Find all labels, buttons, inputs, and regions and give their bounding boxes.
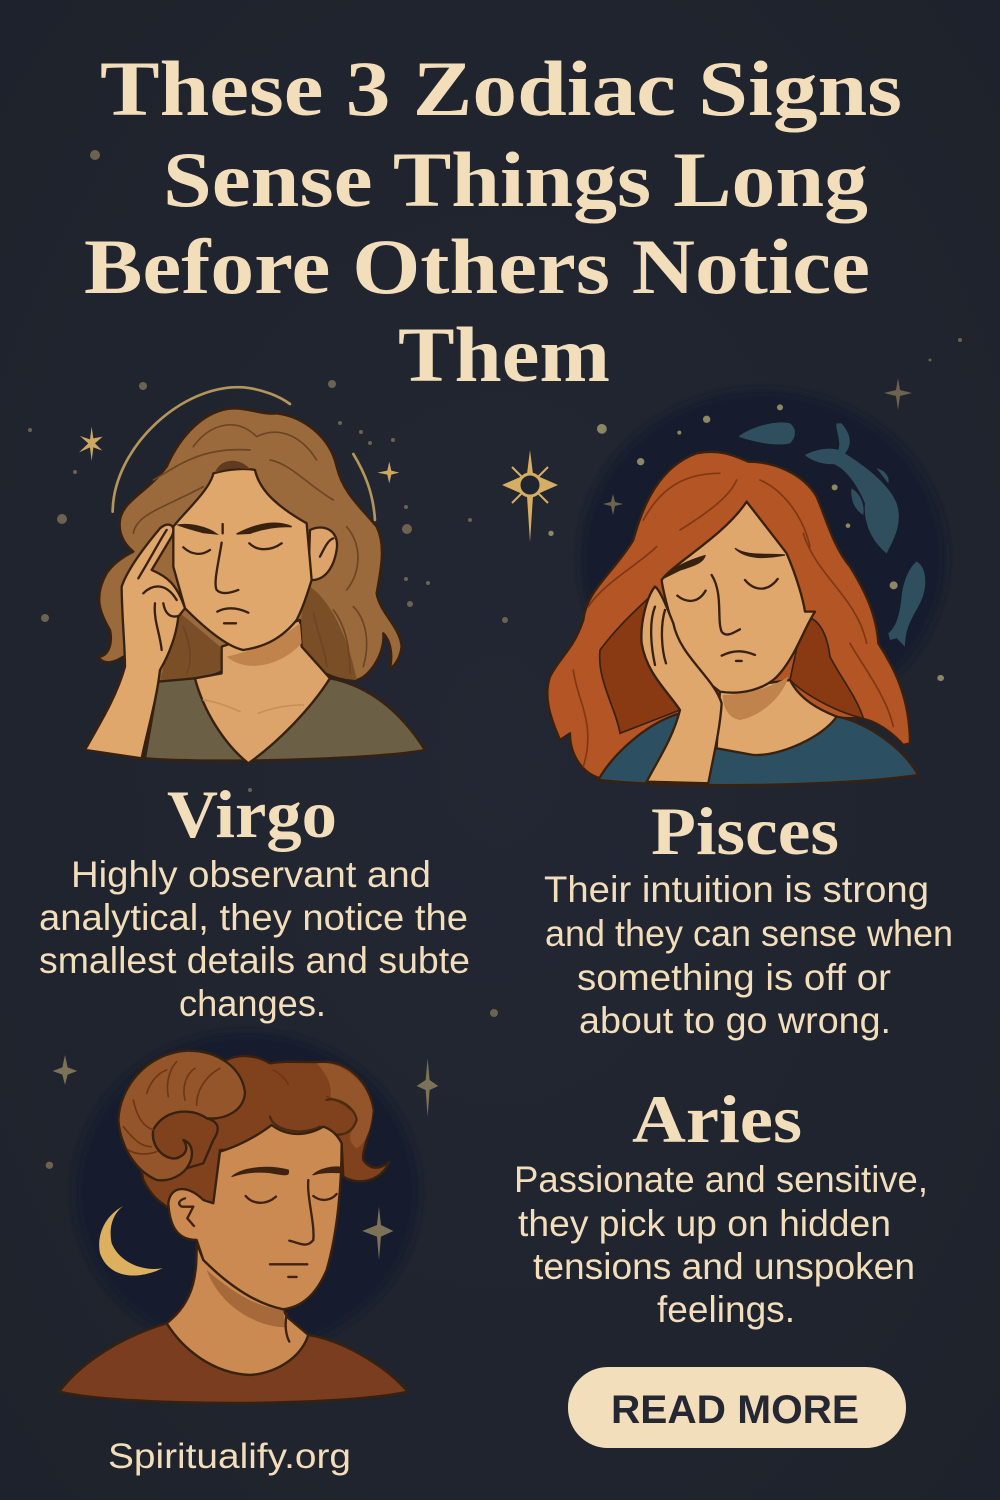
virgo illustration [79, 387, 425, 763]
hair shadow [160, 583, 357, 682]
neck [195, 620, 330, 763]
hair [547, 452, 910, 778]
virgo description: Highly observant and [71, 854, 431, 895]
aries description: feelings. [657, 1289, 795, 1330]
hair strands [573, 473, 893, 767]
title: Them [398, 311, 610, 398]
pisces description: something is off or [577, 957, 891, 998]
crescent moon [99, 1206, 163, 1276]
aries description: tensions and unspoken [533, 1246, 915, 1287]
facial features [663, 548, 785, 578]
shirt [59, 1323, 408, 1403]
neck shadow [723, 677, 788, 720]
virgo description: smallest details and subte [39, 940, 470, 981]
pisces description: about to go wrong. [579, 1000, 891, 1041]
read more button [568, 1367, 906, 1448]
title [84, 45, 902, 398]
forehead hair [215, 461, 250, 473]
face [662, 502, 815, 693]
virgo heading: Virgo [167, 776, 337, 852]
night circle [580, 390, 946, 726]
aries illustration [46, 1032, 438, 1403]
shirt [598, 713, 918, 785]
aries heading: Aries [632, 1081, 802, 1157]
virgo description: analytical, they notice the [39, 897, 468, 938]
pisces illustration [502, 378, 946, 785]
fingers [651, 607, 666, 665]
neck [167, 1243, 308, 1375]
hand [641, 587, 722, 783]
pisces description: Their intuition is strong [544, 869, 929, 910]
left ram horn [118, 1051, 245, 1180]
night circle [75, 1032, 419, 1352]
virgo description: changes. [179, 983, 326, 1024]
source site: Spiritualify.org [108, 1437, 351, 1476]
compass star [502, 450, 558, 542]
back hair [140, 1056, 389, 1207]
sparkle stars [79, 427, 399, 483]
hair [98, 408, 402, 682]
hair strands [133, 425, 367, 673]
ear [308, 527, 337, 580]
shirt [145, 678, 425, 763]
collarbones [203, 700, 303, 713]
pisces description [544, 869, 953, 1041]
arm and hand [85, 525, 185, 758]
title: Sense Things Long [163, 136, 868, 223]
horn ridges [123, 1062, 350, 1154]
face [173, 469, 312, 650]
hair shadow [600, 593, 863, 733]
title: These 3 Zodiac Signs [100, 45, 902, 132]
pisces heading: Pisces [651, 793, 839, 869]
inner curl [153, 1112, 218, 1168]
aries description: they pick up on hidden [518, 1203, 891, 1244]
circle dots [548, 404, 944, 681]
fish [738, 422, 925, 647]
fingers [138, 530, 178, 650]
virgo description [39, 854, 470, 1024]
title: Before Others Notice [84, 223, 870, 310]
face and ear [168, 1125, 342, 1309]
facial features [232, 1167, 342, 1177]
neck shadow [207, 1270, 285, 1327]
pisces description: and they can sense when [545, 913, 953, 954]
neck [717, 680, 837, 755]
read more button: READ MORE [611, 1388, 859, 1432]
faint star [603, 378, 912, 515]
right horn [317, 1063, 373, 1148]
aries description [514, 1159, 928, 1330]
aries description: Passionate and sensitive, [514, 1159, 928, 1200]
stars [53, 1055, 438, 1260]
neck shadow [227, 623, 302, 666]
halo arcs [113, 387, 290, 512]
facial features [178, 523, 292, 534]
curly fringe line [270, 1099, 357, 1135]
background star dots [28, 150, 962, 1168]
